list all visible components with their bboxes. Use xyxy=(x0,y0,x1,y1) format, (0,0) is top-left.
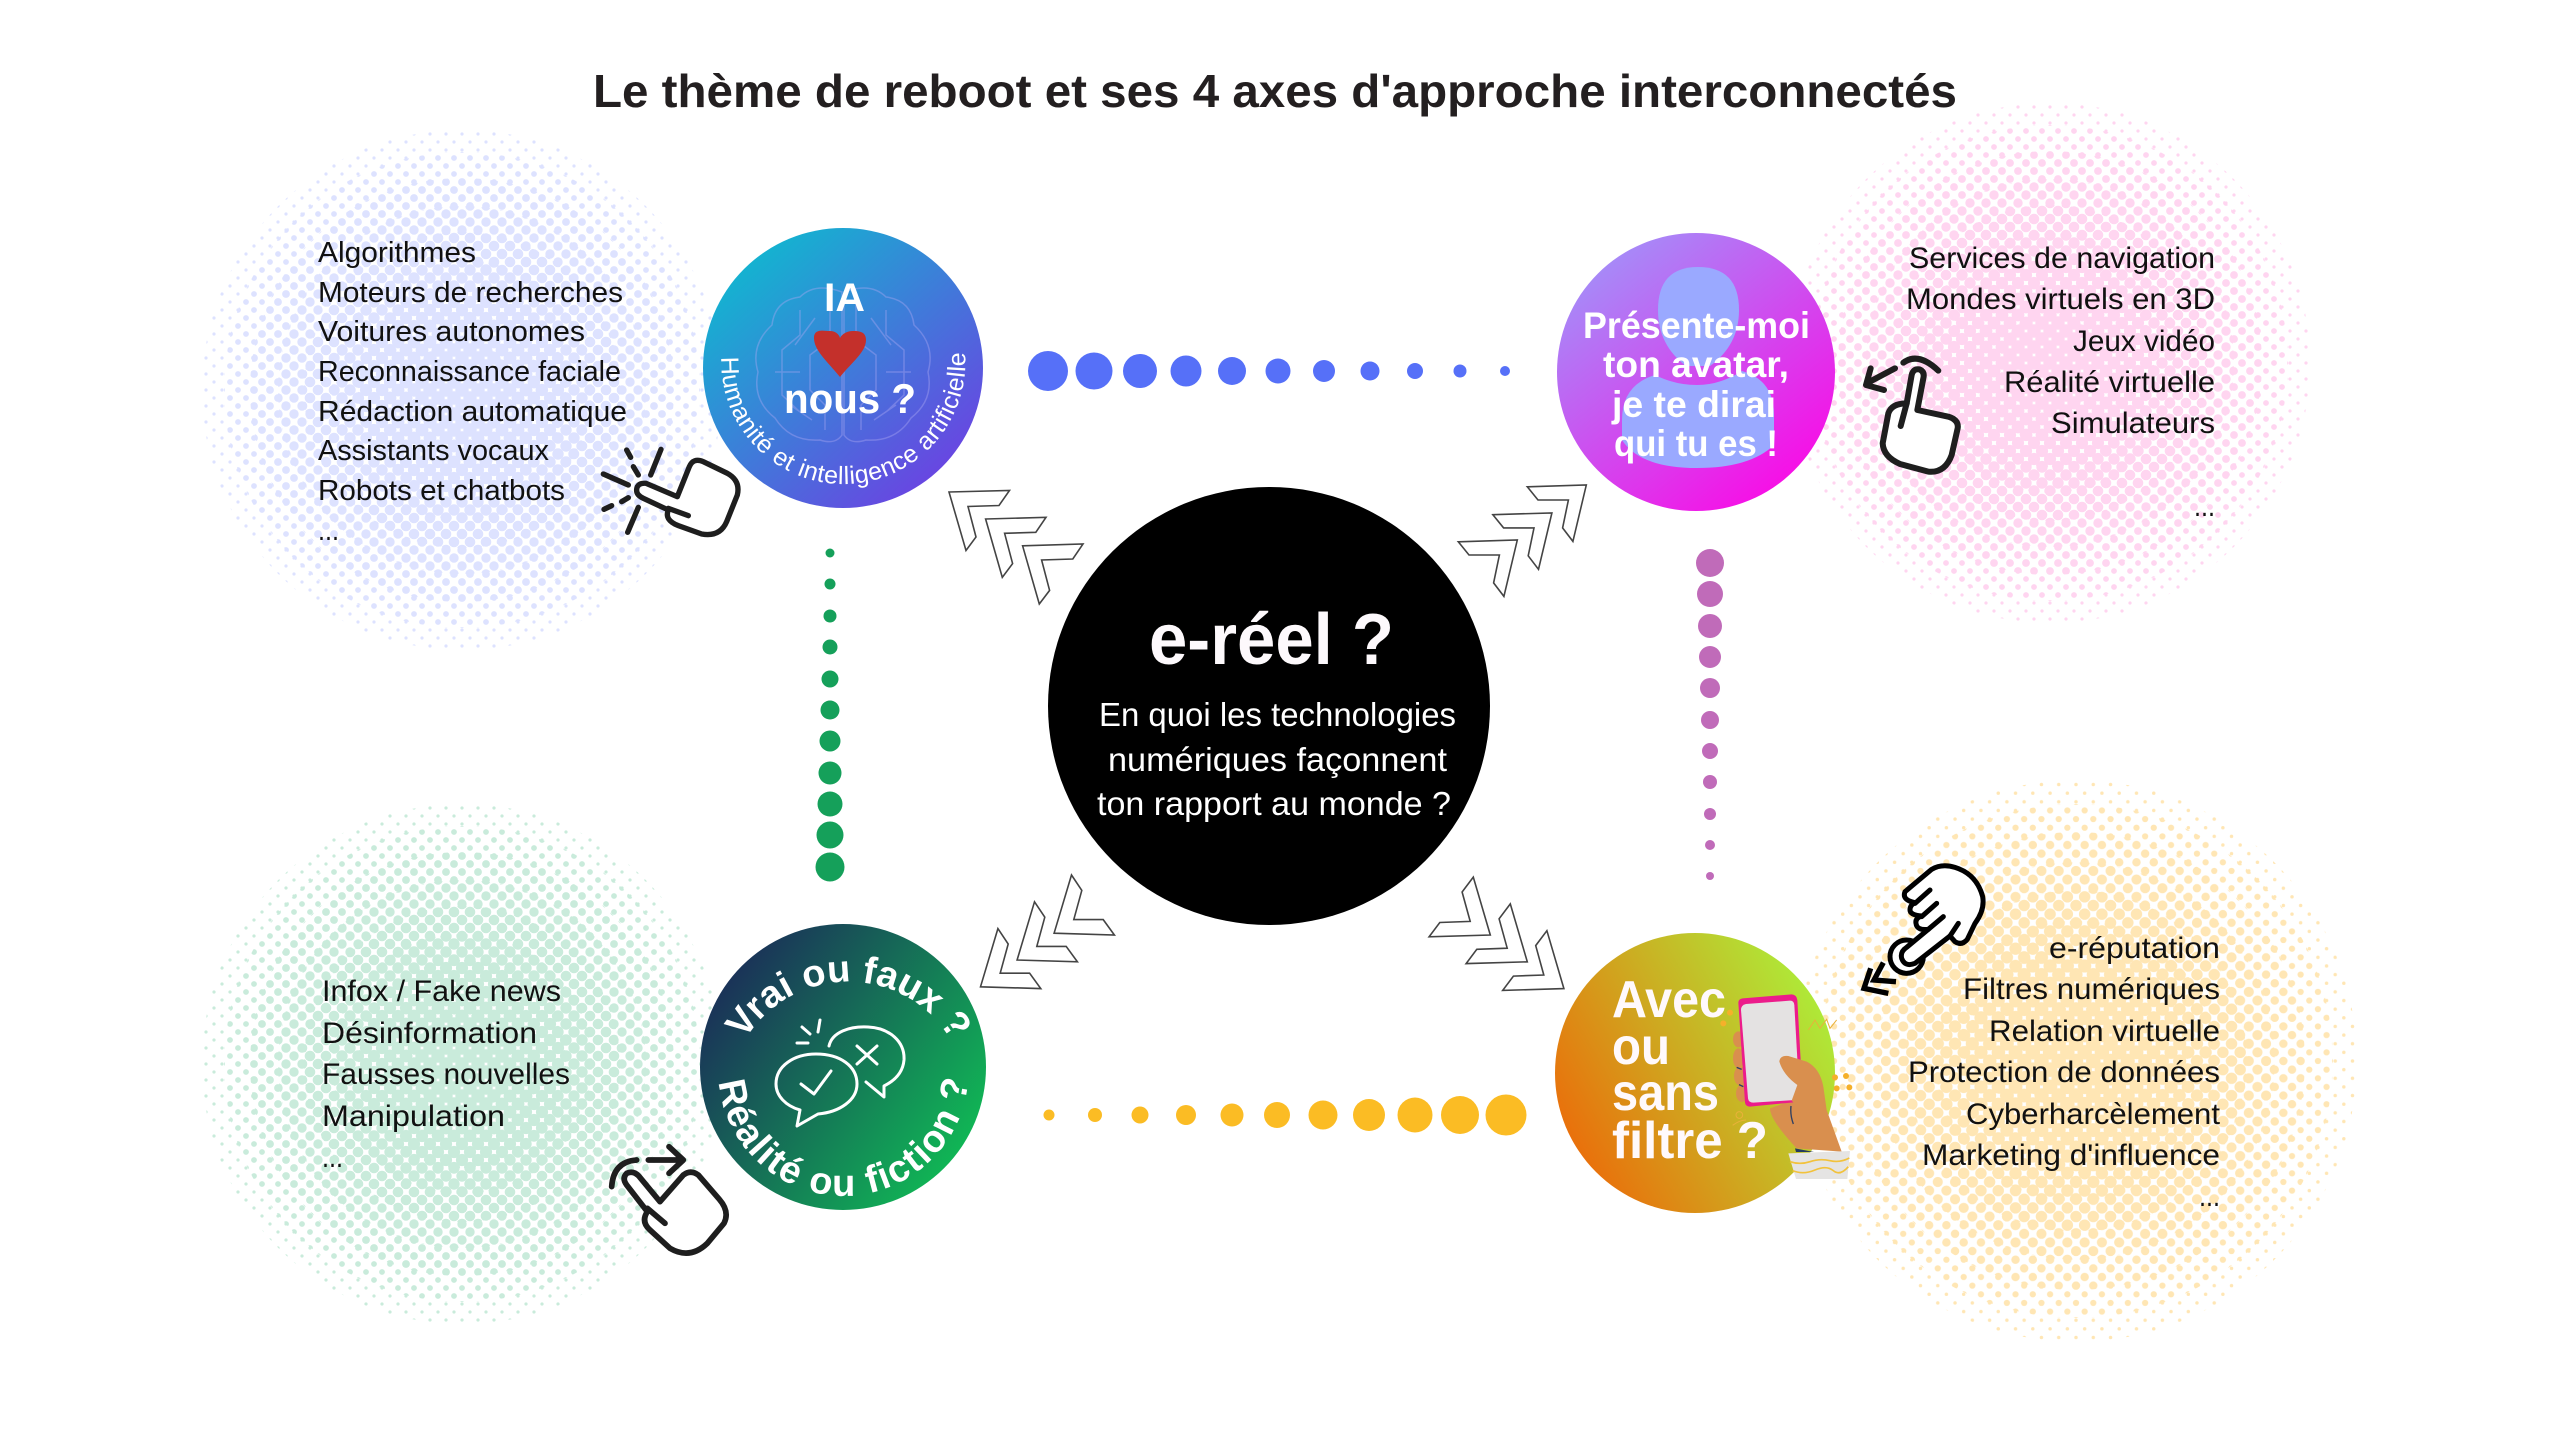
dotted connector: green xyxy=(816,548,844,882)
list: filter topics: Marketing d'influence xyxy=(1922,1139,2220,1172)
list: fake news topics: Manipulation xyxy=(322,1100,505,1133)
badge: vrai ou faux xyxy=(700,924,986,1210)
list: fake news topics: Infox / Fake news xyxy=(322,975,561,1008)
central question: En quoi les technologies xyxy=(1099,696,1456,733)
list: avatar topics: ... xyxy=(2194,490,2215,523)
heart xyxy=(814,331,866,377)
list: avatar topics: Mondes virtuels en 3D xyxy=(1906,283,2215,316)
central heading: e-réel ? xyxy=(1149,600,1394,680)
list: IA topics: Reconnaissance faciale xyxy=(318,356,621,388)
badge: filtre xyxy=(1555,933,1835,1213)
dotted connector: magenta xyxy=(1696,549,1724,880)
arrows: toward vrai ou faux xyxy=(980,875,1114,989)
list: filter topics: Cyberharcèlement xyxy=(1966,1098,2221,1131)
icon: swipe hand, avatar xyxy=(1866,359,1958,472)
icon: tap hand, IA xyxy=(603,449,738,535)
badge title: nous: nous ? xyxy=(784,375,916,422)
dotted connector: yellow xyxy=(1044,1094,1526,1136)
brain illustration xyxy=(756,288,930,442)
list: avatar topics: Simulateurs xyxy=(2051,407,2215,440)
list: IA topics: Rédaction automatique xyxy=(318,396,627,428)
list: IA topics: Moteurs de recherches xyxy=(318,277,623,309)
list: avatar topics: Réalité virtuelle xyxy=(2004,366,2215,399)
halftone: pink xyxy=(1808,106,2308,620)
curved caption: Humanité et intelligence artificielle xyxy=(721,354,966,488)
list: fake news topics: ... xyxy=(322,1141,343,1174)
list: filter topics: e-réputation xyxy=(2049,932,2220,965)
central question: ton rapport au monde ? xyxy=(1097,785,1451,822)
badge title: Présente-moi xyxy=(1583,305,1810,346)
list: IA topics xyxy=(318,237,627,547)
curved title top: Vrai ou faux ? xyxy=(724,956,970,1034)
badge title: filtre ? xyxy=(1612,1112,1768,1170)
badge: avatar xyxy=(1557,233,1835,511)
badge title: IA: IA xyxy=(824,276,865,320)
list: filter topics: Filtres numériques xyxy=(1963,973,2220,1006)
list: filter topics xyxy=(1908,932,2221,1213)
list: filter topics: Protection de données xyxy=(1908,1056,2220,1089)
badge title xyxy=(1612,971,1768,1170)
icon: hand holding phone xyxy=(1720,994,1852,1179)
title: Le thème de reboot et ses 4 axes d'approche interconnectés xyxy=(593,65,1957,117)
list: IA topics: Algorithmes xyxy=(318,237,476,269)
dotted connector: blue xyxy=(1028,351,1510,391)
central circle xyxy=(1048,487,1490,925)
halftone: yellow xyxy=(1806,782,2354,1340)
icon: press hand, filtre xyxy=(1864,866,1983,993)
badge title: ton avatar, xyxy=(1603,344,1789,385)
curved title bottom: Réalité ou fiction ? xyxy=(718,1078,968,1196)
badge: IA xyxy=(703,228,983,508)
arrows: toward IA xyxy=(949,490,1083,604)
list: IA topics: Voitures autonomes xyxy=(318,316,585,348)
halftone: blue xyxy=(204,132,718,648)
arrows: toward avatar xyxy=(1458,485,1586,596)
icon: swipe hand, vrai ou faux xyxy=(612,1147,726,1253)
list: IA topics: Robots et chatbots xyxy=(318,475,565,507)
central question: numériques façonnent xyxy=(1108,741,1447,778)
badge title: qui tu es ! xyxy=(1614,423,1778,464)
badge title xyxy=(1583,305,1810,464)
icon: speech bubbles xyxy=(776,1020,904,1126)
list: fake news topics xyxy=(322,975,570,1174)
halftone: green xyxy=(204,806,712,1322)
badge title: sans xyxy=(1612,1064,1719,1122)
list: fake news topics: Désinformation xyxy=(322,1017,537,1050)
list: fake news topics: Fausses nouvelles xyxy=(322,1058,570,1091)
list: avatar topics: Jeux vidéo xyxy=(2073,325,2215,358)
central question xyxy=(1097,696,1456,822)
badge title: ou xyxy=(1612,1018,1670,1076)
badge title: je te dirai xyxy=(1611,384,1776,425)
list: filter topics: Relation virtuelle xyxy=(1989,1015,2220,1048)
list: avatar topics xyxy=(1906,242,2215,523)
list: filter topics: ... xyxy=(2199,1180,2220,1213)
list: avatar topics: Services de navigation xyxy=(1909,242,2215,275)
badge title: Avec xyxy=(1612,971,1726,1029)
avatar silhouette xyxy=(1622,267,1774,468)
arrows: toward filtre xyxy=(1429,877,1564,990)
list: IA topics: Assistants vocaux xyxy=(318,435,549,467)
list: IA topics: ... xyxy=(318,515,339,547)
